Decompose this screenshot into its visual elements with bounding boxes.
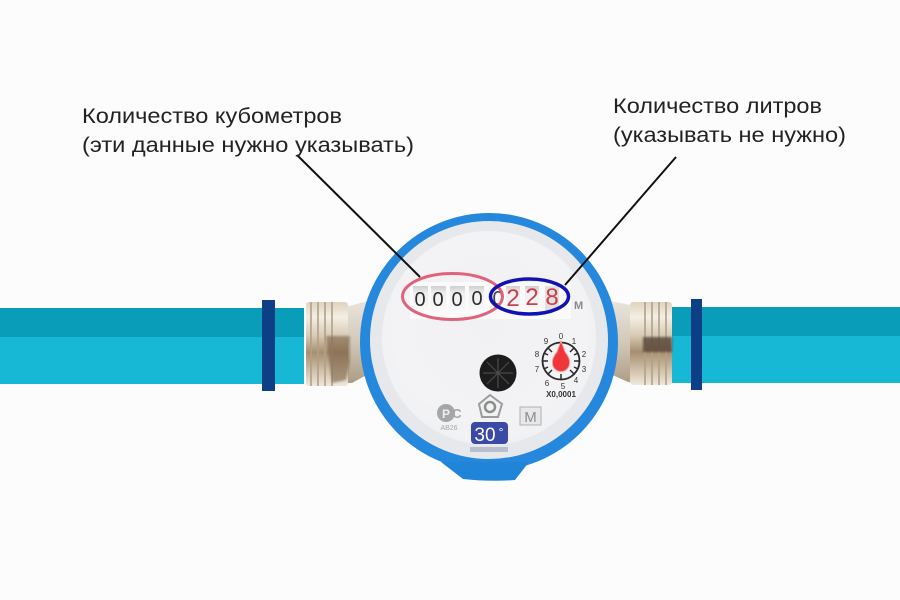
litres dial: 9	[544, 337, 549, 346]
certification mark: M logo: M	[524, 409, 537, 426]
label: cubic metres: (эти данные нужно указывать)	[82, 134, 414, 157]
litres dial: 7	[535, 365, 540, 374]
litres dial: X0,0001	[546, 390, 576, 399]
litres dial: 5	[561, 382, 566, 391]
temperature badge: °	[499, 425, 504, 439]
certification mark: RST: С	[452, 406, 462, 421]
water meter	[360, 213, 618, 481]
left brass fitting	[306, 300, 372, 386]
meter blue housing	[360, 213, 618, 481]
litres digits: 8	[545, 284, 559, 311]
right brass fitting	[606, 300, 672, 385]
right pipe clamp	[691, 299, 702, 390]
litres digits: 2	[506, 285, 520, 312]
label: litres: Количество литров	[613, 95, 822, 118]
litres dial: 4	[574, 376, 579, 385]
left pipe clamp	[262, 300, 275, 391]
litres dial: 1	[572, 337, 577, 346]
left pipe	[0, 308, 304, 384]
label: cubic metres: Количество кубометров	[82, 105, 342, 128]
cubic metres digits: 0	[414, 289, 426, 311]
cubic metres digits: 0	[471, 288, 483, 310]
red ellipse: cubic metres	[402, 274, 502, 320]
litres dial: 6	[545, 379, 550, 388]
certification mark: RST	[437, 404, 462, 432]
litres dial: 2	[582, 350, 587, 359]
cubic metres digits: 0	[451, 289, 463, 311]
meter dial face	[382, 231, 596, 445]
leader line: cubic metres	[297, 155, 420, 277]
temperature badge	[470, 422, 508, 452]
cubic metres digits: 0	[432, 289, 444, 311]
cubic metres digits	[414, 288, 504, 311]
litres dial	[535, 332, 587, 399]
temperature badge: 30	[474, 425, 496, 446]
litres digits: 2	[525, 284, 539, 311]
label: litres: (указывать не нужно)	[613, 124, 846, 147]
litres dial: 8	[535, 350, 540, 359]
black knob	[480, 354, 516, 392]
litres digits	[506, 284, 559, 312]
certification mark: RST: Р	[442, 407, 450, 421]
unit label: M	[574, 300, 583, 312]
litres dial: 3	[582, 365, 587, 374]
certification mark: pentagon	[479, 395, 502, 417]
certification mark: RST: АВ26	[440, 425, 458, 432]
litres dial: 0	[559, 332, 564, 341]
blue ellipse: litres	[490, 279, 568, 314]
cubic metres digits: 0	[492, 288, 504, 310]
counter window	[410, 282, 571, 319]
certification mark: M logo	[520, 407, 541, 426]
meter dial lip	[370, 221, 608, 459]
leader line: litres	[565, 157, 676, 285]
right pipe	[671, 307, 900, 383]
